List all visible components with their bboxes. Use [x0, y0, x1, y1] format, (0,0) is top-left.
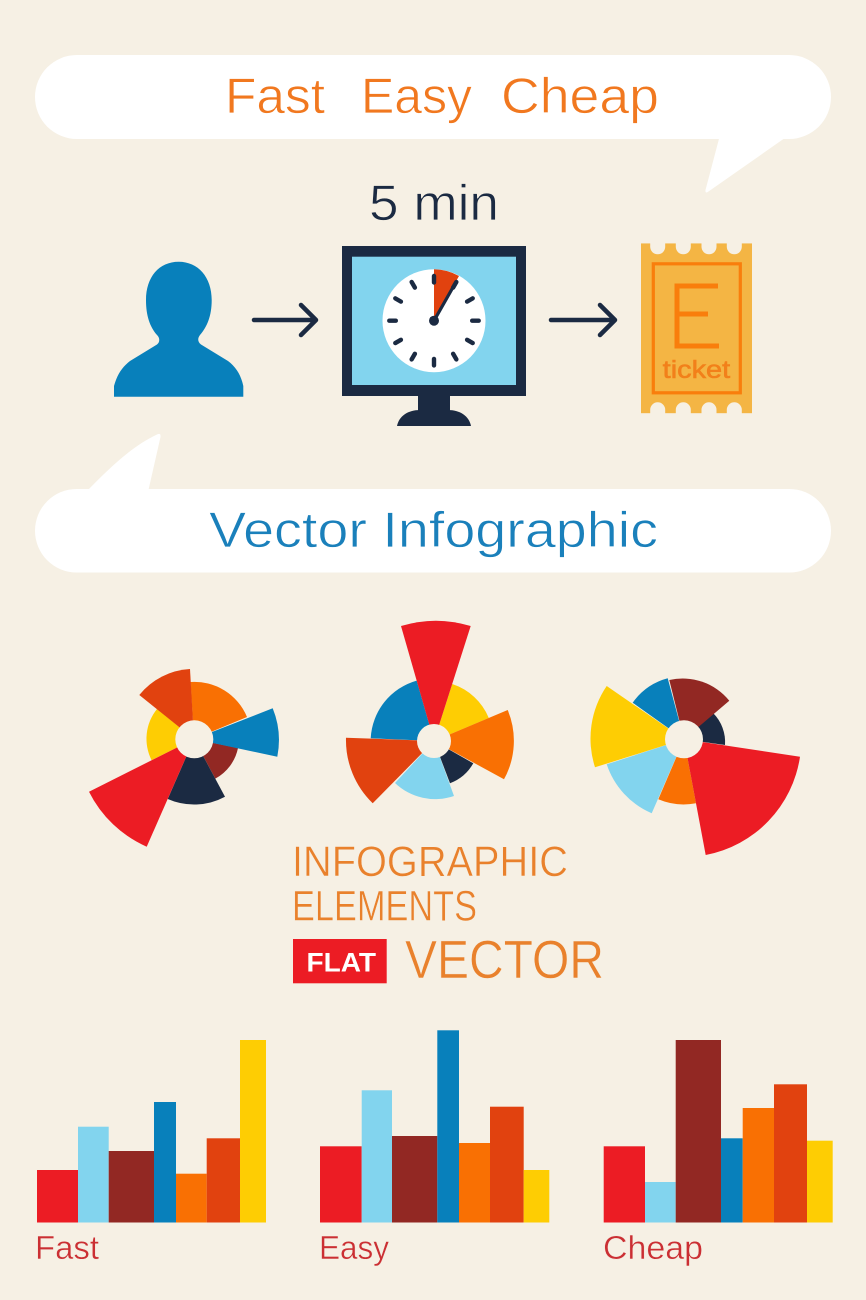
label: Cheap: Cheap — [603, 1229, 703, 1266]
label: Fast: Fast — [35, 1229, 99, 1266]
panel: bottom speech bubble — [35, 434, 831, 572]
arrow: monitor to ticket — [551, 305, 615, 335]
heading: Fast Easy Cheap — [225, 68, 659, 124]
bar chart: Fast — [35, 1040, 266, 1266]
icon: e-ticket — [636, 232, 757, 424]
chart: polar pie left — [89, 669, 279, 847]
title: infographic elements — [292, 838, 604, 990]
badge: FLAT — [293, 939, 387, 983]
bar chart: Cheap — [603, 1040, 833, 1266]
arrow: person to monitor — [254, 305, 316, 335]
icon: monitor with clock — [342, 246, 526, 426]
ticket word: ticket — [663, 356, 730, 384]
heading: Fast Easy Cheap: Cheap — [501, 68, 659, 124]
label: Easy: Easy — [319, 1229, 389, 1266]
badge: FLAT: FLAT — [306, 948, 377, 978]
title: infographic elements: VECTOR — [405, 930, 604, 990]
panel: top speech bubble — [35, 55, 831, 192]
heading: Vector Infographic: Vector Infographic — [209, 502, 658, 558]
heading: Fast Easy Cheap: Easy — [361, 68, 472, 124]
bar chart: Easy — [319, 1030, 549, 1266]
heading: Fast Easy Cheap: Fast — [225, 68, 325, 124]
chart: polar pie centre — [346, 621, 514, 803]
chart: polar pie right — [590, 678, 800, 855]
title: infographic elements: INFOGRAPHIC — [292, 838, 568, 886]
icon: clock face — [382, 269, 486, 372]
label: 5 min: 5 min — [369, 175, 499, 231]
icon: person — [114, 262, 243, 397]
ticket E — [677, 286, 719, 346]
title: infographic elements: ELEMENTS — [292, 883, 477, 931]
